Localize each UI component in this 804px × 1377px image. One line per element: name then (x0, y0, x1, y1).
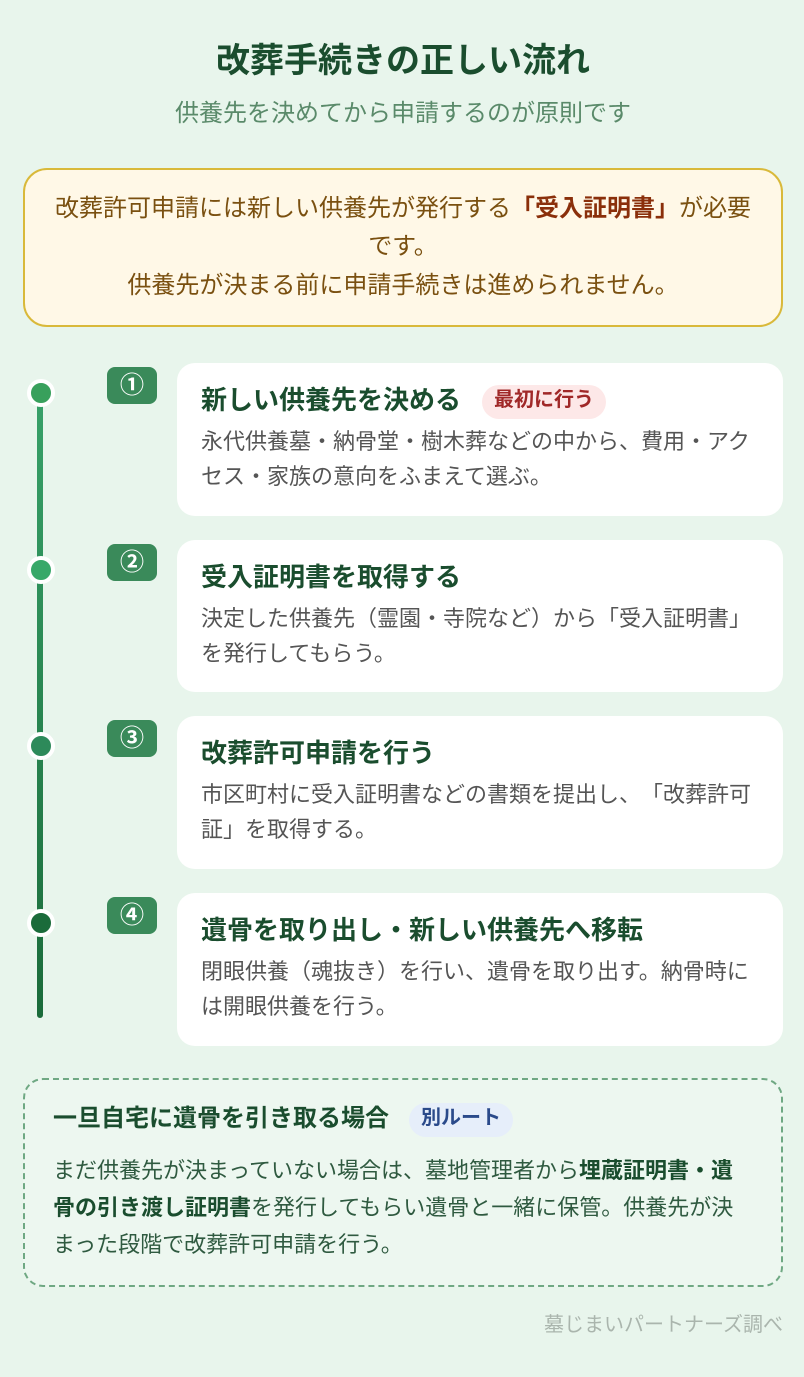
step number 3: ③ (120, 725, 144, 752)
step 3 description (201, 782, 751, 842)
callout: requirement notice: です。 (368, 233, 438, 260)
subtitle: 供養先を決めてから申請するのが原則です (175, 100, 631, 127)
timeline dot 1 (27, 379, 55, 407)
step number 3 (107, 720, 157, 757)
step 4 description: は開眼供養を行う。 (201, 994, 398, 1019)
badge: alternate route (409, 1103, 513, 1137)
step card 1 (177, 363, 783, 516)
badge: alternate route: 別ルート (421, 1107, 501, 1129)
alternate route text: まだ供養先が決まっていない場合は、墓地管理者から埋蔵証明書・遺 (53, 1158, 733, 1183)
step 2 description: 決定した供養先（霊園・寺院など）から「受入証明書」 (201, 606, 751, 631)
step card 3 (177, 716, 783, 869)
badge: first step: 最初に行う (494, 389, 594, 411)
step 4 description (201, 959, 749, 1019)
step 2 description: を発行してもらう。 (201, 641, 396, 666)
step number 4 (107, 897, 157, 934)
step 2 description (201, 606, 751, 666)
title: 改葬手続きの正しい流れ (216, 42, 590, 80)
timeline line (37, 393, 43, 1018)
callout: requirement notice: 改葬許可申請には新しい供養先が発行する「受入証明書」が必要 (55, 195, 751, 222)
step 1 heading: 新しい供養先を決める (201, 385, 461, 415)
step 2 heading: 受入証明書を取得する (201, 562, 461, 592)
alternate route heading: 一旦自宅に遺骨を引き取る場合 (53, 1105, 389, 1132)
step 1 description: 永代供養墓・納骨堂・樹木葬などの中から、費用・アク (201, 429, 750, 454)
step number 1: ① (120, 372, 144, 399)
timeline dot 2 (27, 556, 55, 584)
step 4 description: 閉眼供養（魂抜き）を行い、遺骨を取り出す。納骨時に (201, 959, 749, 984)
step 3 heading: 改葬許可申請を行う (201, 738, 435, 768)
step card 2 (177, 540, 783, 692)
step number 4: ④ (120, 902, 144, 929)
alternate route text: まった段階で改葬許可申請を行う。 (53, 1232, 403, 1257)
alternate route text (53, 1158, 733, 1257)
step number 2 (107, 544, 157, 581)
step card 4 (177, 893, 783, 1046)
step number 2: ② (120, 549, 144, 576)
step 4 heading: 遺骨を取り出し・新しい供養先へ移転 (201, 915, 643, 945)
step 3 description: 市区町村に受入証明書などの書類を提出し、「改葬許可 (201, 782, 751, 807)
step 3 description: 証」を取得する。 (201, 817, 377, 842)
timeline dot 3 (27, 732, 55, 760)
callout: requirement notice: 供養先が決まる前に申請手続きは進められません。 (127, 272, 679, 299)
callout: requirement notice (23, 168, 783, 327)
panel: alternate route (23, 1078, 783, 1287)
source note: 墓じまいパートナーズ調べ (544, 1314, 783, 1336)
alternate route text: 骨の引き渡し証明書を発行してもらい遺骨と一緒に保管。供養先が決 (53, 1195, 733, 1220)
timeline dot 4 (27, 909, 55, 937)
step 1 description: セス・家族の意向をふまえて選ぶ。 (201, 464, 552, 489)
badge: first step (482, 385, 606, 419)
step number 1 (107, 367, 157, 404)
step 1 description (201, 429, 750, 489)
